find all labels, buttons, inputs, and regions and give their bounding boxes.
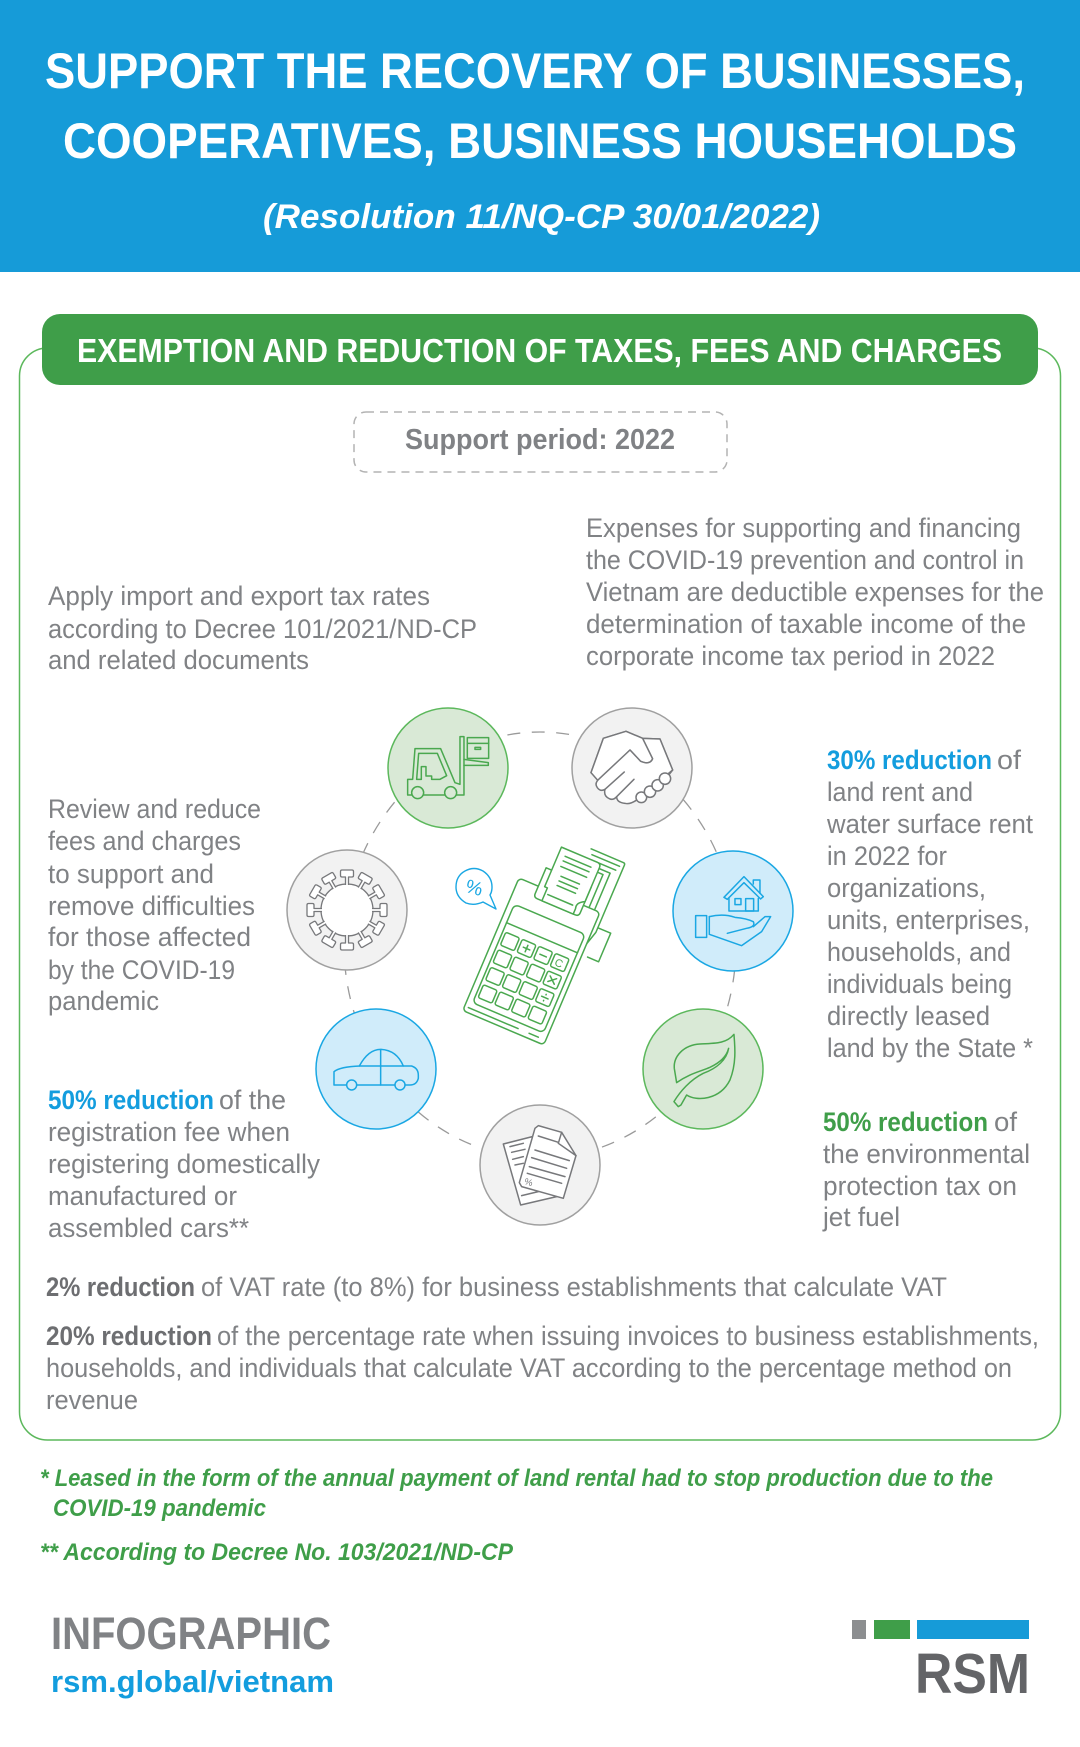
text: environmental protection tax: the environmental [823, 1139, 1030, 1169]
icon: handshake [572, 708, 692, 828]
icon: calculator with receipt [463, 827, 638, 1052]
subtitle: (Resolution 11/NQ-CP 30/01/2022) [263, 198, 820, 236]
text: registration fee reduction: assembled cars** [48, 1213, 249, 1243]
text: COVID-19 expenses: determination of taxable income of the [586, 609, 1026, 639]
text: registration fee reduction: manufactured or [48, 1181, 237, 1211]
text: percentage rate reduction: revenue [46, 1385, 138, 1415]
text: land rent reduction: households, and [827, 937, 1011, 967]
text: COVID-19 expenses [586, 513, 1044, 671]
text: registration fee reduction: 50% reduction [48, 1085, 214, 1115]
icon: leaf [643, 1009, 763, 1129]
text: fees and charges: pandemic [48, 986, 159, 1016]
dashed ring [344, 732, 736, 1158]
text: environmental protection tax: protection tax on [823, 1171, 1017, 1201]
text: registration fee reduction: registration fee when [48, 1117, 290, 1147]
footnotes: COVID-19 pandemic [53, 1495, 266, 1522]
icon: documents [480, 1105, 600, 1225]
text: land rent reduction: land by the State * [827, 1033, 1033, 1063]
text: COVID-19 expenses: corporate income tax period in 2022 [586, 641, 995, 671]
text: import and export tax [48, 581, 477, 675]
icon: percent speech bubble [456, 868, 496, 909]
footer label: INFOGRAPHIC [51, 1608, 331, 1659]
text: import and export tax: according to Decree 101/2021/ND-CP [48, 614, 477, 644]
icon: calculator with receipt: C [553, 957, 565, 971]
text: environmental protection tax: jet fuel [822, 1202, 900, 1232]
title: COOPERATIVES, BUSINESS HOUSEHOLDS [63, 113, 1017, 169]
text: land rent reduction: individuals being [827, 969, 1012, 999]
footer label: rsm.global/vietnam [51, 1664, 334, 1699]
text: fees and charges: to support and [48, 859, 214, 889]
panel heading: EXEMPTION AND REDUCTION OF TAXES, FEES AND CHARGES [77, 332, 1002, 369]
text: land rent reduction: units, enterprises, [827, 905, 1030, 935]
text: land rent reduction: 30% reduction [827, 745, 992, 775]
text: land rent reduction [826, 745, 1034, 1063]
title [45, 43, 1025, 169]
panel heading [42, 314, 1038, 385]
text: percentage rate reduction: of the percentage rate when issuing invoices to business establishments, [217, 1321, 1039, 1351]
footnotes: * Leased in the form of the annual payment of land rental had to stop production due to the [40, 1465, 993, 1492]
support period box: Support period: 2022 [405, 424, 675, 456]
text: percentage rate reduction: 20% reduction [46, 1321, 212, 1351]
text: VAT reduction: 2% reduction [46, 1272, 195, 1302]
text: VAT reduction: of VAT rate (to 8%) for business establishments that calculate VAT [201, 1272, 947, 1302]
icon: virus [287, 850, 407, 970]
text: COVID-19 expenses: the COVID-19 prevention and control in [586, 545, 1024, 575]
text: environmental protection tax [822, 1107, 1030, 1232]
icon: percent speech bubble: % [463, 876, 485, 901]
RSM logo [852, 1620, 1030, 1706]
footer label [51, 1608, 334, 1699]
panel: exemption and reduction [20, 314, 1060, 1440]
header banner [0, 0, 1080, 272]
text: COVID-19 expenses: Expenses for supporting and financing [586, 513, 1021, 543]
text: land rent reduction: land rent and [827, 777, 973, 807]
text: registration fee reduction: of the [219, 1085, 286, 1115]
text: percentage rate reduction: households, and individuals that calculate VAT according to the percentage method on [46, 1353, 1012, 1383]
text: fees and charges: Review and reduce [48, 794, 261, 824]
text: land rent reduction: of [997, 745, 1022, 775]
text: import and export tax: and related documents [48, 645, 309, 675]
support period box [354, 412, 727, 472]
text: fees and charges: for those affected [48, 922, 251, 952]
text: registration fee reduction: registering domestically [48, 1149, 321, 1179]
text: land rent reduction: water surface rent [826, 809, 1034, 839]
icon: documents: % [523, 1176, 534, 1188]
icon: forklift [388, 708, 508, 828]
text: import and export tax: Apply import and export tax rates [48, 581, 430, 611]
text: percentage rate reduction [46, 1321, 1039, 1415]
text: fees and charges: by the COVID-19 [48, 955, 235, 985]
footnotes [40, 1465, 993, 1566]
icon: house in hand [673, 851, 793, 971]
RSM logo: RSM [915, 1642, 1030, 1706]
text: registration fee reduction [48, 1085, 321, 1243]
icon: car [316, 1009, 436, 1129]
text: environmental protection tax: 50% reduction [823, 1107, 988, 1137]
text: land rent reduction: organizations, [827, 873, 986, 903]
text: COVID-19 expenses: Vietnam are deductible expenses for the [586, 577, 1044, 607]
text: environmental protection tax: of [994, 1107, 1018, 1137]
text: land rent reduction: directly leased [827, 1001, 990, 1031]
text: fees and charges [48, 794, 261, 1016]
text: land rent reduction: in 2022 for [827, 841, 947, 871]
text: fees and charges: fees and charges [48, 826, 241, 856]
text: fees and charges: remove difficulties [48, 891, 255, 921]
footnotes: ** According to Decree No. 103/2021/ND-CP [40, 1539, 514, 1566]
